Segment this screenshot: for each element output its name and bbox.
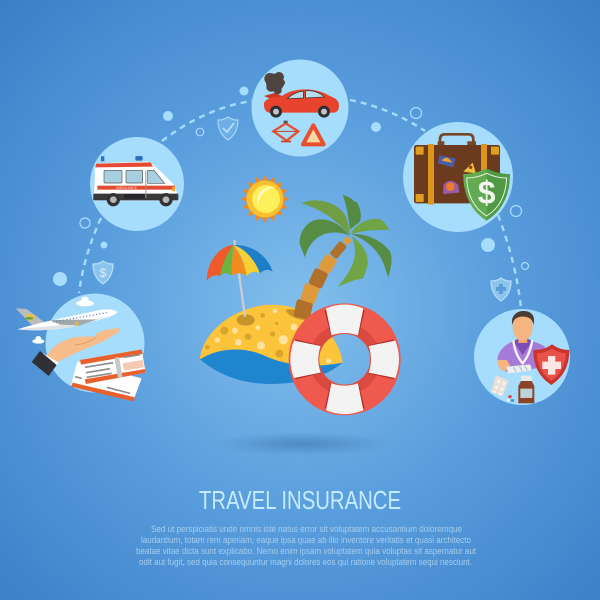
ground shadow — [213, 432, 393, 456]
palm — [293, 195, 392, 320]
lifebuoy — [290, 304, 399, 414]
description text: Sed ut perspiciatis unde omnis iste natus error sit voluptatem accusantium doloremque — [151, 524, 462, 534]
panel: medical care — [474, 309, 570, 405]
panel: car breakdown — [252, 60, 348, 156]
illustration: red shield, pills and bottle — [491, 344, 569, 403]
island — [200, 305, 343, 384]
illustration: suitcase with dollar shield: $ — [478, 174, 496, 210]
illustration: broken car, jack and warning triangle — [264, 72, 339, 144]
panel: luggage — [403, 122, 513, 232]
panel: ambulance — [90, 137, 184, 231]
icon: shield with dollar outline — [93, 261, 113, 284]
illustration: ambulance van: AMBULANCE — [116, 186, 138, 190]
illustration: injured man — [497, 311, 545, 373]
description text — [136, 524, 476, 567]
description text: laudantium, totam rem aperiam, eaque ipsa quae ab illo inventore veritatis et quasi architecto — [141, 535, 471, 545]
icon: shield with cross outline — [491, 278, 511, 301]
icon: shield with dollar outline: $ — [100, 266, 107, 280]
illustration: island with umbrella, palm and lifebuoy — [200, 195, 399, 414]
illustration: plane, hand and tickets — [16, 297, 120, 376]
icon: shield with check outline — [218, 117, 238, 140]
description text: beatae vitae dicta sunt explicabo. Nemo enim ipsam voluptatem quia voluptas sit aspernatur aut — [136, 546, 476, 556]
icon: sun — [241, 175, 289, 223]
umbrella — [207, 240, 273, 317]
description text: odit aut fugit, sed quia consequuntur magni dolores eos qui ratione voluptatem sequi nesciunt. — [139, 557, 472, 567]
panel: flight and tickets — [16, 294, 146, 401]
decorative bubbles — [53, 86, 528, 286]
title: TRAVEL INSURANCE — [199, 485, 401, 515]
dashed connecting arc — [79, 100, 521, 308]
